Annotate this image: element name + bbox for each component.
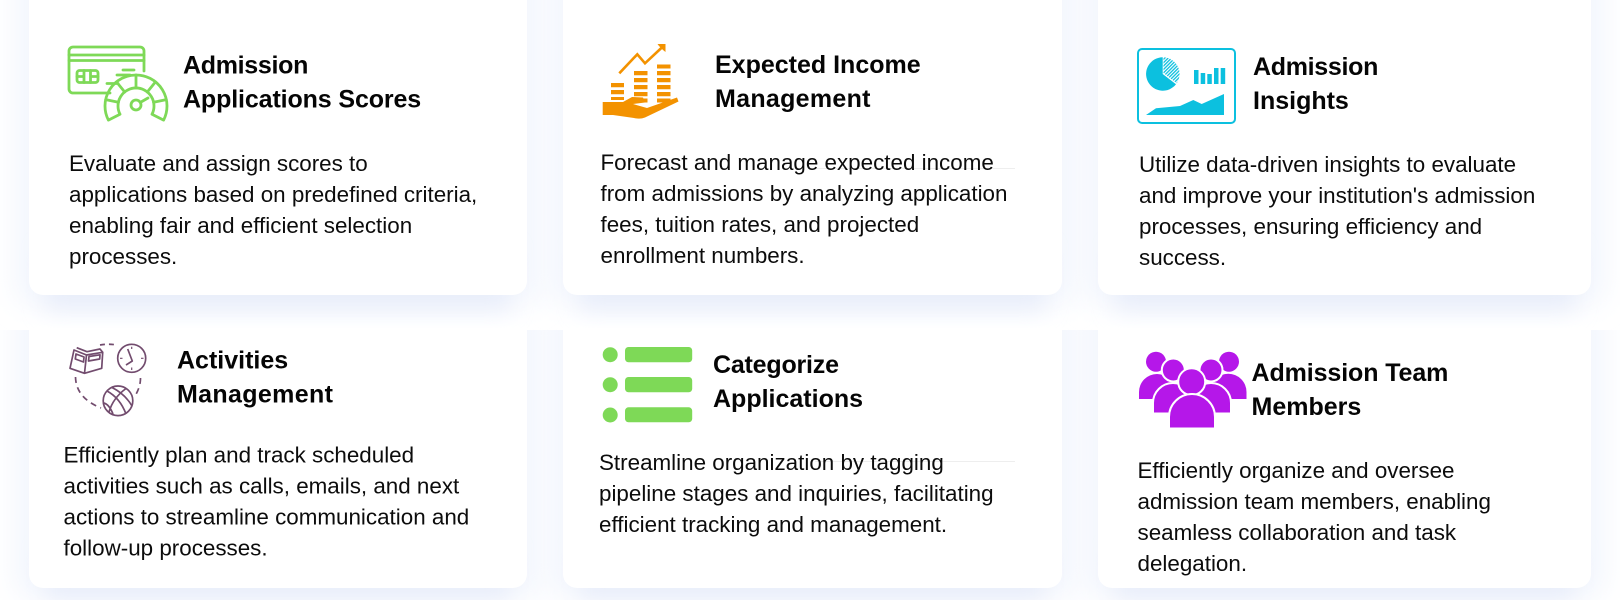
description: efficient tracking and management. [599, 512, 947, 537]
icon: group of people [1139, 352, 1246, 428]
icon: analytics dashboard [1138, 49, 1235, 123]
faint rule in categorize card [815, 461, 1015, 462]
description: actions to streamline communication and [64, 504, 469, 530]
description: from admissions by analyzing application [600, 181, 1007, 206]
description: pipeline stages and inquiries, facilitating [599, 481, 994, 506]
heading: Admission Team [1252, 359, 1448, 387]
icon: book, clock and ball cycle [70, 344, 146, 416]
heading: Admission [183, 52, 308, 80]
description: Evaluate and assign scores to [69, 151, 368, 176]
description: Streamline organization by tagging [599, 450, 944, 475]
card: admission insights [1138, 49, 1535, 270]
faint rule in expected income card [815, 168, 1015, 169]
description: processes, ensuring efficiency and [1139, 214, 1482, 239]
panel: row two shadows and cards [19, 330, 1601, 600]
card: admission applications scores [69, 47, 477, 269]
icon: credit card with gauge [69, 47, 167, 120]
heading: Expected Income [715, 51, 921, 79]
description: admission team members, enabling [1138, 489, 1491, 514]
description: enrollment numbers. [600, 243, 805, 268]
description: activities such as calls, emails, and next [64, 474, 460, 498]
description: seamless collaboration and task [1138, 520, 1457, 545]
description: Efficiently organize and oversee [1138, 458, 1454, 483]
panel: row one shadows and cards [15, 0, 1605, 310]
card: activities management [64, 344, 469, 560]
description: fees, tuition rates, and projected [600, 212, 919, 237]
heading: Management [177, 380, 334, 408]
heading: Applications Scores [183, 86, 421, 114]
description: follow-up processes. [64, 536, 268, 560]
heading: Admission [1253, 53, 1378, 81]
description: Efficiently plan and track scheduled [64, 442, 414, 468]
heading: Categorize [713, 351, 839, 379]
description: applications based on predefined criteria, [69, 182, 477, 207]
description: Utilize data-driven insights to evaluate [1139, 152, 1516, 177]
heading: Insights [1253, 87, 1349, 115]
description: enabling fair and efficient selection [69, 213, 412, 238]
heading: Activities [177, 346, 288, 374]
description: and improve your institution's admission [1139, 183, 1535, 208]
description: Forecast and manage expected income [600, 150, 994, 175]
card: admission team members [1138, 352, 1491, 576]
card: categorize applications [599, 347, 994, 537]
description: delegation. [1138, 551, 1247, 576]
heading: Applications [713, 385, 863, 413]
icon: hand with coins and rising arrow [603, 44, 678, 119]
heading: Management [715, 85, 871, 113]
icon: green list [603, 347, 692, 422]
description: processes. [69, 244, 177, 269]
description: success. [1139, 245, 1226, 270]
card: expected income management [600, 44, 1007, 268]
heading: Members [1252, 393, 1361, 421]
